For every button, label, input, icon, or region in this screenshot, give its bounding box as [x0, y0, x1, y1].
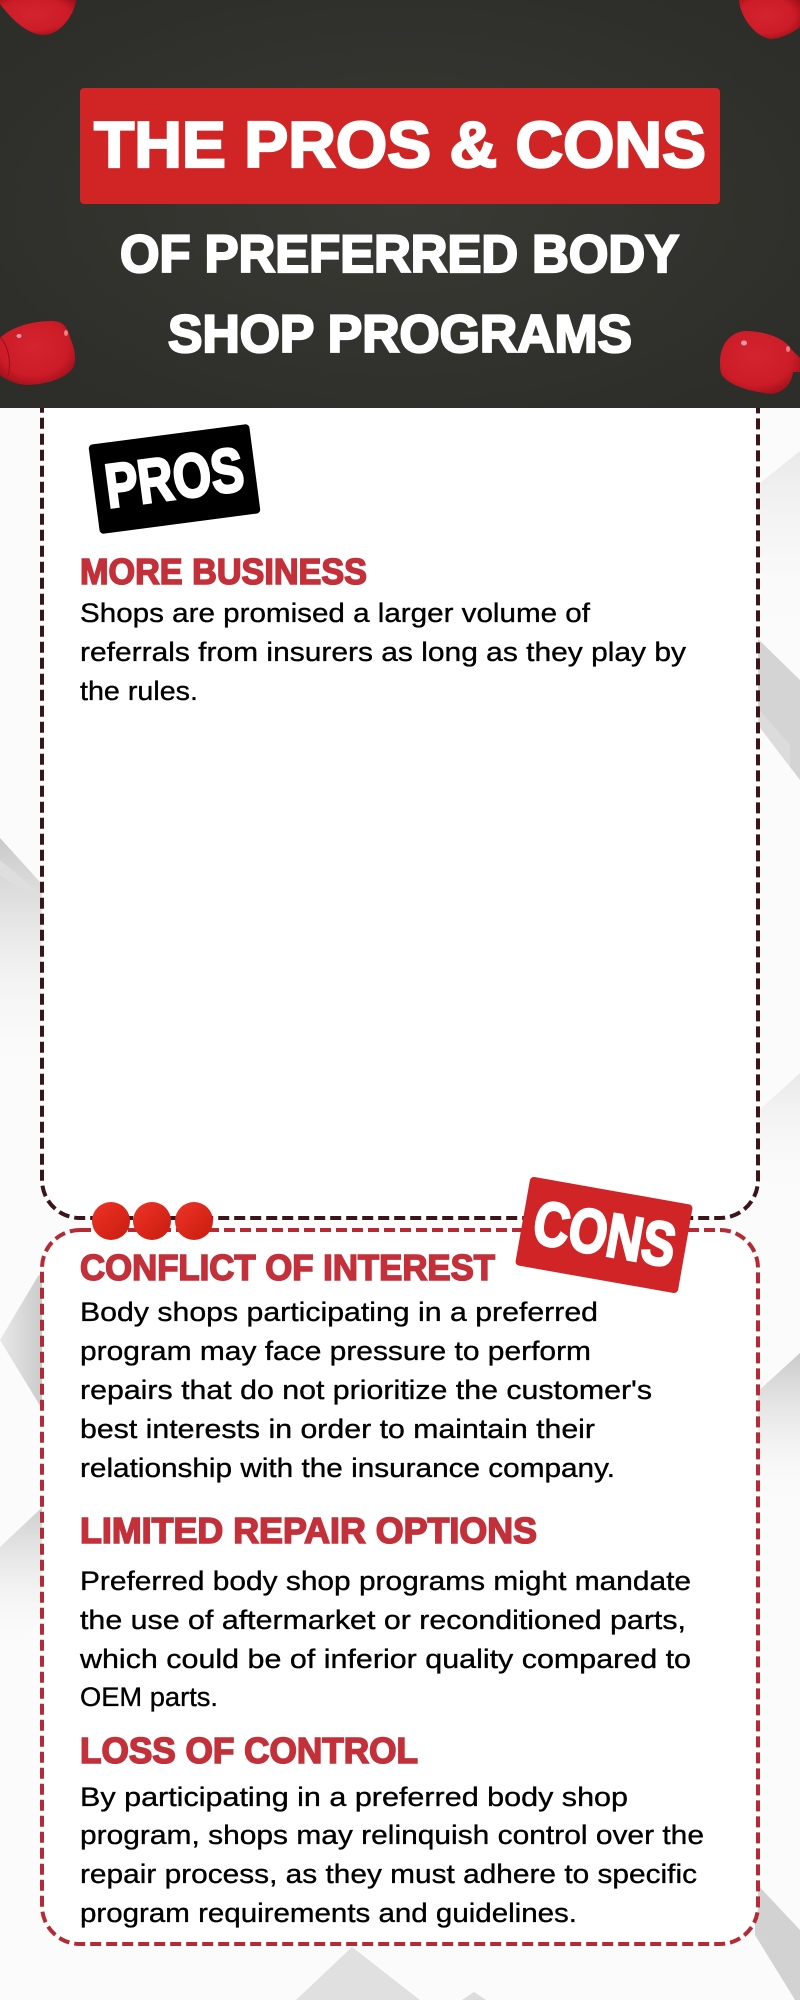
text: more business description: referrals from insurers as long as they play by — [80, 637, 687, 667]
title box — [80, 88, 720, 204]
icon: boxing glove top right — [739, 0, 800, 39]
pros badge: PROS — [101, 435, 248, 522]
text: limited repair options description: which could be of inferior quality compared to — [79, 1644, 691, 1674]
text: loss of control description: repair process, as they must adhere to specific — [80, 1859, 697, 1889]
pros badge — [88, 424, 261, 534]
icon: boxing glove top left — [0, 0, 76, 35]
text: more business description: Shops are promised a larger volume of — [80, 598, 591, 628]
header banner — [0, 0, 800, 408]
text: loss of control description: By participating in a preferred body shop — [80, 1782, 628, 1812]
title line 3: SHOP PROGRAMS — [168, 305, 632, 364]
title line 1: THE PROS & CONS — [94, 108, 706, 181]
panel: cons — [42, 1230, 758, 1944]
text: loss of control description — [80, 1782, 704, 1928]
title line 2: OF PREFERRED BODY — [120, 225, 679, 284]
heading: limited repair options: LIMITED REPAIR OPTIONS — [80, 1510, 537, 1551]
panel: pros — [42, 360, 758, 1218]
text: conflict of interest description: relationship with the insurance company. — [80, 1453, 615, 1483]
icon: boxing glove bottom right — [720, 331, 800, 394]
text: conflict of interest description: best interests in order to maintain their — [80, 1414, 595, 1444]
text: conflict of interest description: repairs that do not prioritize the customer's — [80, 1375, 652, 1405]
text: limited repair options description — [79, 1566, 691, 1712]
text: conflict of interest description — [80, 1297, 652, 1483]
text: limited repair options description: OEM parts. — [80, 1682, 218, 1712]
text: loss of control description: program requirements and guidelines. — [80, 1898, 577, 1928]
text: conflict of interest description: Body shops participating in a preferred — [80, 1297, 598, 1327]
heading: loss of control: LOSS OF CONTROL — [80, 1730, 418, 1771]
heading: conflict of interest: CONFLICT OF INTEREST — [80, 1247, 495, 1288]
heading: more business: MORE BUSINESS — [80, 551, 367, 592]
text: limited repair options description: the use of aftermarket or reconditioned parts, — [80, 1605, 686, 1635]
cons badge: CONS — [528, 1188, 681, 1281]
text: more business description — [80, 598, 687, 706]
text: conflict of interest description: program may face pressure to perform — [80, 1336, 591, 1366]
text: limited repair options description: Preferred body shop programs might mandate — [80, 1566, 691, 1596]
icon: boxing glove bottom left — [0, 321, 75, 385]
text: more business description: the rules. — [80, 676, 198, 706]
text: loss of control description: program, shops may relinquish control over the — [80, 1820, 704, 1850]
decorative red dots — [92, 1202, 213, 1240]
